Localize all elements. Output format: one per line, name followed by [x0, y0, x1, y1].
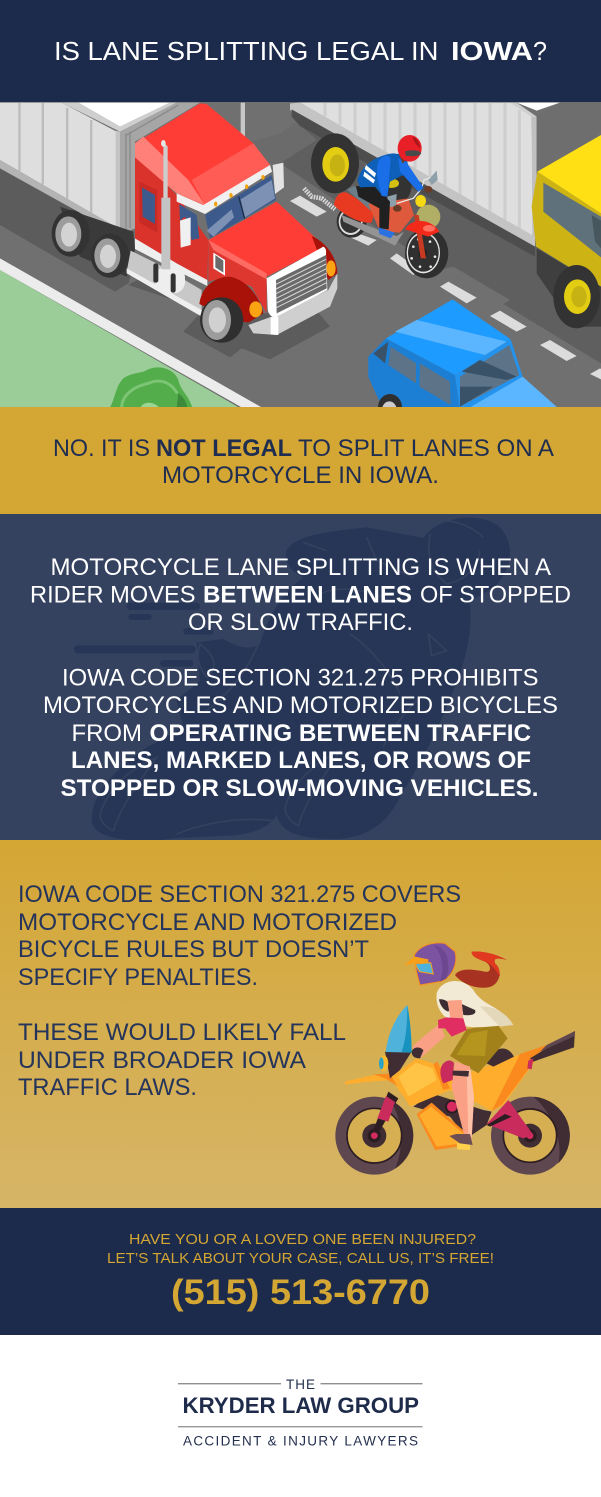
title: IS LANE SPLITTING LEGAL IN [54, 36, 446, 66]
phone number: (515) 513-6770 [171, 1273, 430, 1312]
title: ? [533, 36, 547, 66]
text: Iowa code section: OPERATING BETWEEN TRAFFIC [150, 720, 531, 747]
answer text: NO. IT IS [53, 435, 150, 462]
logo: firm name: KRYDER LAW GROUP [182, 1393, 419, 1418]
right-hand road parts [281, 128, 601, 380]
watermark: motorcycle silhouette [74, 518, 510, 841]
text: Iowa code section: IOWA CODE SECTION 321.275 PROHIBITS [62, 664, 538, 692]
logo: tagline: ACCIDENT & INJURY LAWYERS [183, 1434, 418, 1448]
text: no specified penalties: SPECIFY PENALTIES. [18, 964, 258, 991]
text: Iowa code section: MOTORCYCLES AND MOTORIZED BICYCLES [43, 692, 558, 719]
blue car [368, 299, 557, 407]
text: broader traffic laws: TRAFFIC LAWS. [18, 1074, 197, 1101]
bush [109, 367, 192, 408]
text: no specified penalties: IOWA CODE SECTION 321.275 COVERS [18, 881, 461, 908]
text: what lane splitting is: RIDER MOVES [30, 582, 196, 608]
panel: answer [0, 407, 601, 514]
text: what lane splitting is [30, 554, 571, 636]
call to action text: LET’S TALK ABOUT YOUR CASE, CALL US, IT’S FREE! [107, 1250, 494, 1267]
text: broader traffic laws: THESE WOULD LIKELY FALL [18, 1019, 346, 1046]
panel: definition and code section [0, 514, 601, 841]
lane dashes [290, 196, 601, 379]
text: Iowa code section: STOPPED OR SLOW-MOVING VEHICLES. [60, 775, 538, 802]
red semi truck [0, 103, 337, 343]
call to action text [107, 1231, 494, 1267]
call to action text: HAVE YOU OR A LOVED ONE BEEN INJURED? [129, 1231, 476, 1248]
text: what lane splitting is: BETWEEN LANES [203, 582, 412, 608]
text: what lane splitting is: OR SLOW TRAFFIC. [188, 609, 413, 636]
motorcycle rider [304, 135, 448, 278]
text: no specified penalties: MOTORCYCLE AND MOTORIZED [18, 909, 397, 936]
yellow truck [532, 172, 601, 287]
text: no specified penalties: BICYCLE RULES BUT DOESN’T [18, 936, 369, 963]
right trailer wheels [311, 133, 359, 193]
logo: the: THE [286, 1377, 315, 1392]
panel: call to action [0, 1208, 601, 1335]
illustration: woman riding orange motorcycle [335, 943, 575, 1175]
answer text: NOT LEGAL [156, 435, 292, 462]
answer text: MOTORCYCLE IN IOWA. [162, 462, 439, 489]
text: what lane splitting is: MOTORCYCLE LANE SPLITTING IS WHEN A [50, 554, 551, 581]
illustration: highway traffic scene [0, 100, 601, 421]
panel: penalties [0, 840, 601, 1208]
text: what lane splitting is: OF STOPPED [420, 582, 571, 608]
answer text [53, 435, 554, 489]
text: broader traffic laws: UNDER BROADER IOWA [18, 1047, 306, 1074]
title: IOWA [451, 36, 533, 66]
text: broader traffic laws [18, 1019, 346, 1101]
panel: title header [0, 0, 601, 102]
text: Iowa code section [43, 664, 558, 802]
answer text: TO SPLIT LANES ON A [298, 435, 554, 462]
right trailer and yellow truck [290, 103, 601, 421]
panel: footer logo [0, 1335, 601, 1497]
left-hand road, shoulder and verge [0, 103, 330, 410]
text: no specified penalties [18, 881, 461, 991]
text: Iowa code section: FROM [72, 720, 142, 747]
text: Iowa code section: LANES, MARKED LANES, OR ROWS OF [71, 747, 531, 774]
